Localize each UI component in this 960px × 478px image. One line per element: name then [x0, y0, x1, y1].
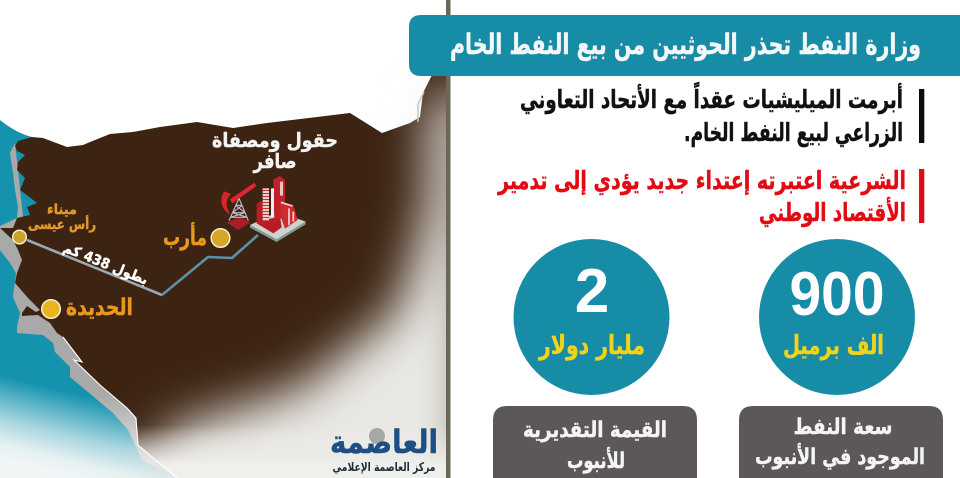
- icon: oil pump and refinery: [221, 176, 306, 242]
- circle: [514, 239, 670, 395]
- label line two: صافر: [253, 149, 296, 173]
- caption line one: القيمة التقديرية: [523, 418, 667, 443]
- pump beam: [230, 183, 256, 203]
- lower fade strip: [136, 425, 446, 478]
- text block: contract: [520, 82, 924, 148]
- block highlights: [281, 202, 293, 225]
- box: [739, 406, 943, 478]
- marker: Marib: [211, 229, 230, 247]
- logo wordmark: العاصمة: [330, 423, 438, 461]
- caption line one: سعة النفط: [794, 415, 892, 440]
- striped column: [263, 188, 269, 220]
- pump head: [221, 191, 231, 215]
- white pipe: [271, 188, 274, 217]
- text block: government warning: [496, 166, 924, 228]
- pipeline west section: [27, 240, 162, 295]
- pipeline east section: [162, 235, 258, 295]
- rig tower: [229, 198, 248, 221]
- caption box: estimated value: [493, 406, 697, 478]
- caption line two: للأنبوب: [567, 446, 625, 474]
- banner background: [409, 15, 960, 76]
- pump base: [227, 217, 250, 230]
- box: [493, 406, 697, 478]
- column stripes: [262, 190, 269, 218]
- refinery blocks: [257, 201, 282, 233]
- label: Ras Isa port: [28, 202, 96, 233]
- right block: [280, 202, 298, 229]
- unit: مليار دولار: [537, 331, 645, 361]
- value: 900: [790, 260, 884, 329]
- refinery platform: [250, 212, 306, 239]
- stat circle: 2 billion dollars: [514, 239, 670, 395]
- logo caption: مركز العاصمة الإعلامي: [332, 460, 436, 474]
- circle: [759, 239, 915, 395]
- logo globe: [369, 428, 385, 444]
- white shoreline: [63, 337, 177, 478]
- red accent bar: [919, 169, 924, 223]
- vertical divider: [446, 0, 450, 478]
- warning line two: الأقتصاد الوطني: [759, 197, 906, 228]
- north coast sliver: [418, 92, 424, 122]
- coastline band: [0, 143, 174, 477]
- label: Hodeidah: الحديدة: [66, 295, 133, 321]
- label line one: ميناء: [47, 202, 77, 218]
- title banner: [409, 15, 960, 76]
- pipeline length label: بطول 438 كم: [61, 240, 150, 289]
- fade of the land into white: [140, 90, 470, 478]
- label line two: رأس عيسى: [28, 215, 96, 233]
- label: Marib: مأرب: [163, 221, 207, 251]
- map of western Yemen: [0, 60, 470, 478]
- sea: [0, 120, 176, 478]
- platform edge: [250, 222, 306, 242]
- black accent bar: [919, 89, 924, 143]
- value: 2: [575, 257, 609, 326]
- tower highlight: [280, 182, 283, 196]
- land mass: [0, 60, 446, 478]
- unit: الف برميل: [783, 331, 884, 361]
- marker: Hodeidah: [42, 300, 60, 318]
- logo: Al-Asima media center: [332, 428, 436, 474]
- label: Safer fields and refinery: [212, 128, 338, 173]
- caption box: oil volume: [739, 406, 943, 478]
- tall tower: [273, 176, 285, 220]
- stat circle: 900 thousand barrels: [759, 239, 915, 395]
- pipeline: [27, 235, 258, 295]
- label line one: حقول ومصفاة: [212, 128, 338, 152]
- marker: Ras Isa: [13, 230, 26, 244]
